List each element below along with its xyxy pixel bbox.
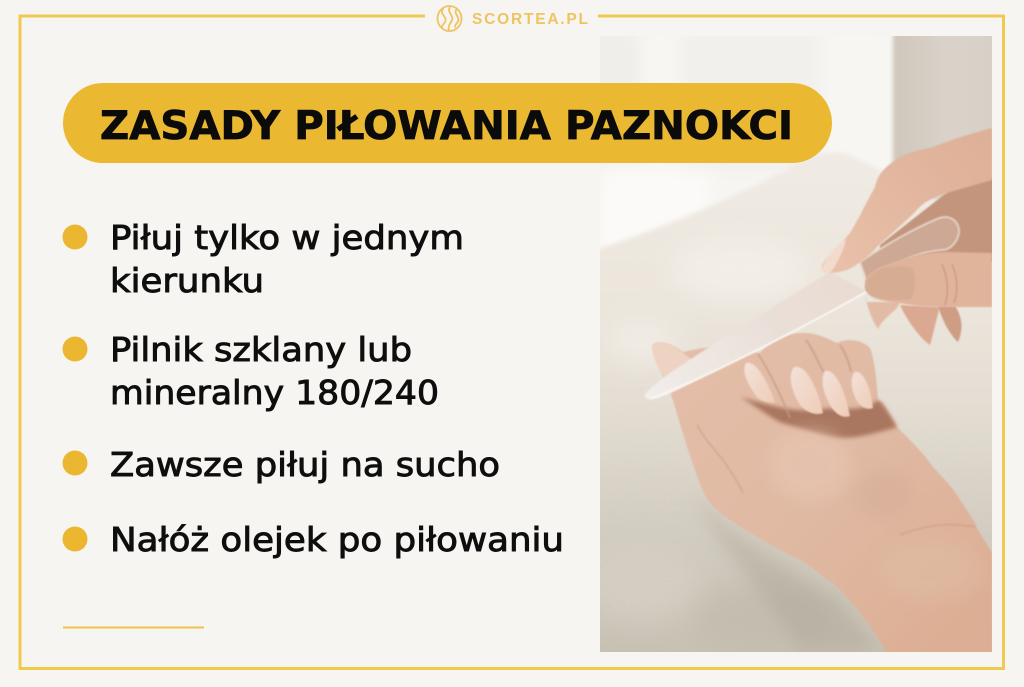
- linen texture: [600, 400, 992, 652]
- back finger 3: [938, 306, 961, 342]
- cloth soft folds: [602, 258, 788, 618]
- list item 4: [62, 520, 564, 559]
- upper hand, back parts: [865, 175, 1000, 345]
- file body: [645, 272, 868, 399]
- bullet: [62, 450, 88, 476]
- item text: mineralny 180/240: [110, 373, 439, 412]
- list item 2: [62, 330, 439, 412]
- logo: Scortea: [438, 6, 588, 31]
- item text: Nałóż olejek po piłowaniu: [110, 520, 564, 559]
- nails, lower hand: [744, 363, 873, 417]
- back finger 2: [900, 305, 940, 345]
- wrist tones: [781, 423, 842, 490]
- list item 1: [62, 218, 464, 300]
- palm and wrist: [653, 333, 992, 660]
- item text: [110, 218, 464, 300]
- list item 3: [62, 445, 500, 484]
- clear grip: [860, 217, 959, 285]
- thumb knuckle lines: [942, 264, 957, 305]
- thumb: [865, 252, 992, 307]
- shadow under lower hand: [711, 518, 868, 650]
- thumb crease: [697, 425, 743, 493]
- frosted edge: [650, 292, 866, 399]
- bullet: [62, 336, 88, 362]
- index fingertip nail: [821, 239, 846, 273]
- photo backdrop: [600, 36, 992, 652]
- curtain, right side: [891, 36, 992, 200]
- window and curtain light: [590, 30, 890, 255]
- item text: Piłuj tylko w jednym: [110, 218, 464, 257]
- index finger: [822, 128, 992, 273]
- photo: hands filing nails with a glass file: [580, 30, 1003, 660]
- item text: Pilnik szklany lub: [110, 330, 412, 369]
- glass nail file: [645, 217, 959, 399]
- bottom accent line: [63, 626, 204, 628]
- item text: Zawsze piłuj na sucho: [110, 445, 500, 484]
- lower hand: [652, 333, 992, 660]
- upper hand, index finger and thumb: [821, 128, 992, 307]
- bullet: [62, 224, 88, 250]
- thumb tip: [652, 343, 690, 377]
- shadowed hollow of the palm: [740, 397, 897, 438]
- finger separation shadows: [758, 340, 851, 418]
- linen cloth: [590, 153, 1000, 660]
- title pill: [63, 83, 832, 163]
- item text: kierunku: [110, 261, 264, 300]
- bullet: [62, 526, 88, 552]
- palm behind the file: [880, 175, 1000, 262]
- back finger 1: [866, 299, 900, 329]
- heading: ZASADY PIŁOWANIA PAZNOKCI: [100, 104, 793, 149]
- thumb nail: [865, 266, 915, 300]
- item text: [110, 330, 439, 412]
- icon: logo mark: [438, 6, 462, 31]
- logo wordmark: SCORTEA.PL: [472, 11, 588, 28]
